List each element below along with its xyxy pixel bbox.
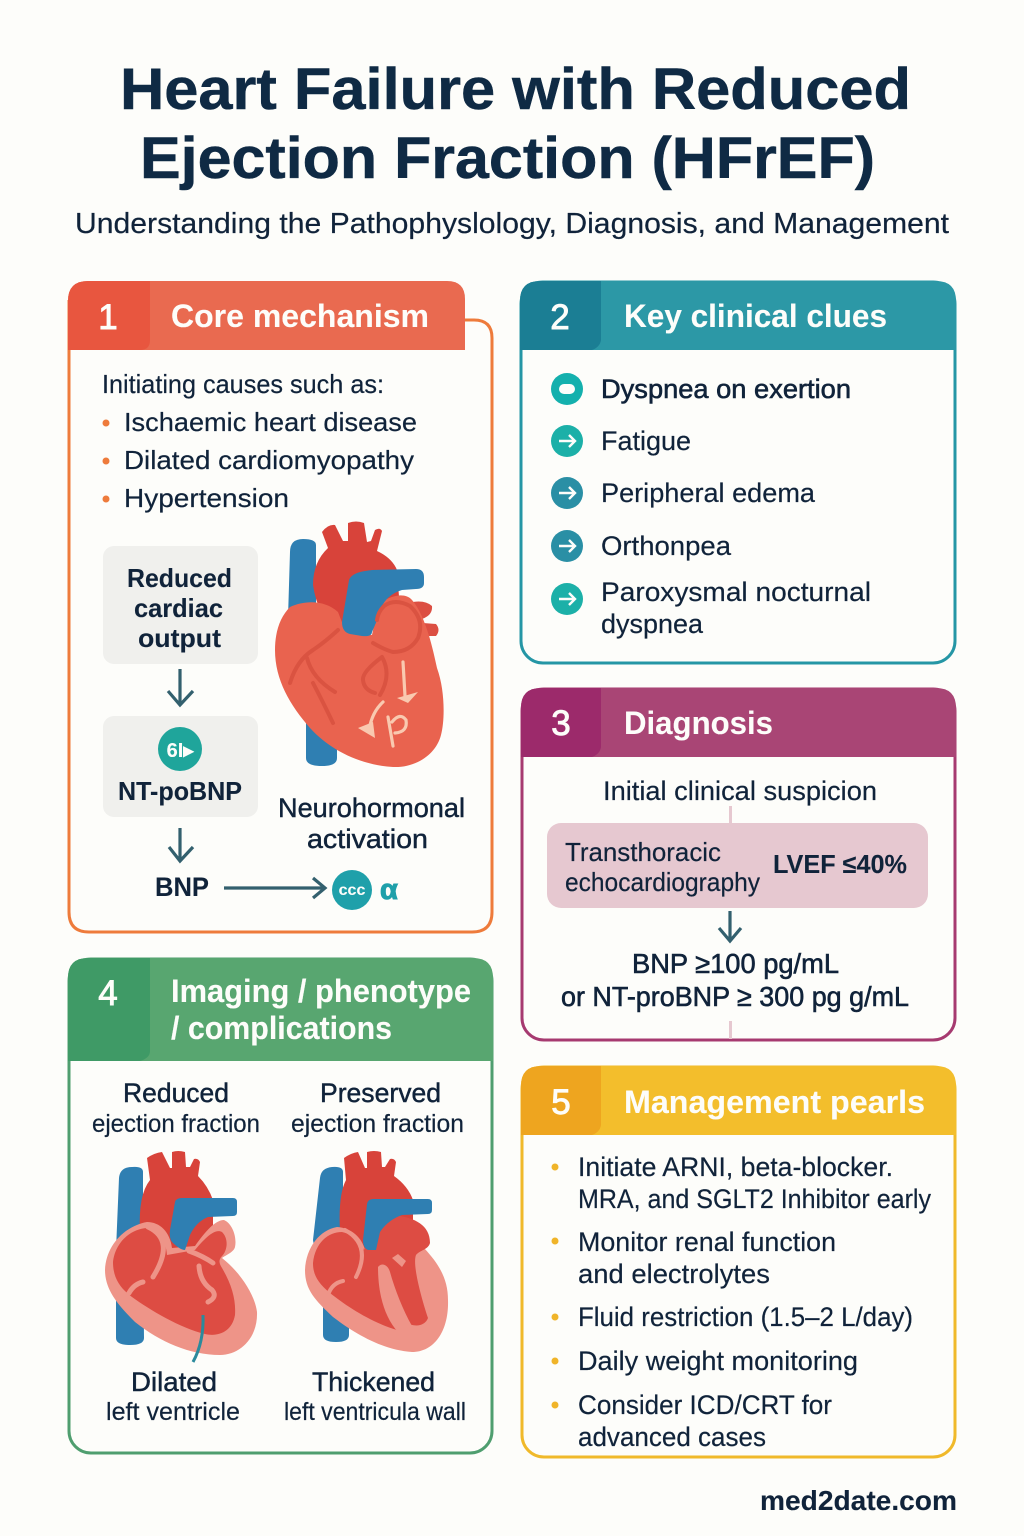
panel: key clinical clues: [520, 281, 956, 663]
pearl: monitor renal function: Monitor renal function: [578, 1227, 836, 1257]
text: initiating causes: Initiating causes such as:: [102, 369, 384, 399]
label: preserved ejection fraction: Preserved: [320, 1078, 441, 1108]
footer: site name: med2date.com: [760, 1485, 957, 1516]
box: reduced cardiac output: [103, 546, 258, 664]
title: Ejection Fraction (HFrEF): [140, 126, 875, 191]
connector: [729, 806, 732, 824]
pearl: ICD/CRT: advanced cases: [578, 1422, 766, 1452]
icon: thickened heart: [305, 1151, 448, 1352]
pearl: daily weight: Daily weight monitoring: [578, 1346, 858, 1376]
clue: fatigue: [551, 425, 691, 457]
clue: orthonpea: Orthonpea: [601, 531, 732, 561]
header: key clinical clues: [520, 281, 956, 350]
label: dilated left ventricle: left ventricle: [106, 1398, 240, 1426]
box: echocardiography and LVEF: [547, 823, 928, 908]
label: reduced ejection fraction: Reduced: [123, 1078, 229, 1108]
box: reduced cardiac output: Reduced: [127, 563, 232, 593]
box: echocardiography and LVEF: Transthoracic: [565, 837, 721, 867]
title: [120, 57, 911, 191]
panel: imaging phenotype complications: [68, 958, 493, 1453]
label: thickened left ventricular wall: Thickened: [312, 1367, 435, 1397]
header: diagnosis: Diagnosis: [624, 705, 773, 741]
icon: heart anatomy: [275, 522, 444, 767]
pearl: ICD/CRT: [552, 1390, 832, 1452]
header: diagnosis: 3: [551, 704, 571, 743]
header: management pearls: 5: [551, 1083, 571, 1122]
header: imaging phenotype complications: Imaging / phenotype: [171, 973, 471, 1009]
panel: core mechanism: [68, 281, 492, 932]
label: neurohormonal activation: activation: [307, 824, 428, 854]
icon: alpha badge: ccc: [339, 882, 365, 899]
pearl: fluid restriction: Fluid restriction (1.5–2 L/day): [578, 1302, 913, 1332]
arrow: NT-poBNP to BNP: [169, 828, 193, 861]
pearl: monitor renal function: [552, 1227, 836, 1289]
arrow: echo to natriuretic peptides: [719, 911, 741, 941]
label: dilated left ventricle: [106, 1367, 240, 1426]
box: echocardiography and LVEF: echocardiography: [565, 867, 760, 897]
clue: fatigue: Fatigue: [601, 426, 691, 456]
panel: management pearls: [521, 1066, 956, 1457]
clue: paroxysmal nocturnal dyspnea: [551, 577, 871, 639]
arrow: BNP to neurohormonal: [224, 878, 325, 898]
label: BNP: BNP: [155, 872, 209, 902]
header: core mechanism: [68, 281, 465, 350]
text: natriuretic peptide thresholds: BNP ≥100 pg/mL: [632, 948, 839, 979]
header: key clinical clues: 2: [550, 298, 570, 337]
label: reduced ejection fraction: [92, 1078, 260, 1138]
pearl: initiate therapy: MRA, and SGLT2 Inhibitor early: [578, 1184, 931, 1214]
header: core mechanism: 1: [98, 298, 118, 337]
header: management pearls: [521, 1066, 956, 1135]
panel: diagnosis: [521, 688, 956, 1040]
header: diagnosis: [521, 688, 956, 757]
text: natriuretic peptide thresholds: [561, 948, 909, 1012]
text: initiating causes: [102, 369, 417, 513]
label: preserved ejection fraction: ejection fraction: [291, 1110, 464, 1138]
label: thickened left ventricular wall: [284, 1367, 466, 1426]
clue: paroxysmal nocturnal dyspnea: Paroxysmal nocturnal: [601, 577, 871, 607]
connector: [729, 1021, 732, 1039]
clue: orthonpea: [551, 530, 732, 562]
label: thickened left ventricular wall: left ventricula wall: [284, 1398, 466, 1426]
clue: peripheral edema: Peripheral edema: [601, 478, 816, 508]
text: natriuretic peptide thresholds: or NT-proBNP ≥ 300 pg g/mL: [561, 981, 909, 1012]
header: imaging phenotype complications: [68, 958, 493, 1061]
label: preserved ejection fraction: [291, 1078, 464, 1138]
box: NT-poBNP: 6I▸: [167, 740, 194, 762]
label: neurohormonal activation: Neurohormonal: [278, 793, 465, 823]
subtitle: Understanding the Pathophyslology, Diagnosis, and Management: [75, 208, 949, 240]
text: initiating causes: Hypertension: [124, 483, 289, 513]
pearl: ICD/CRT: Consider ICD/CRT for: [578, 1390, 832, 1420]
box: reduced cardiac output: cardiac: [134, 593, 223, 623]
title: Heart Failure with Reduced: [120, 57, 911, 122]
box: NT-poBNP: [103, 716, 258, 817]
clue: paroxysmal nocturnal dyspnea: dyspnea: [601, 609, 704, 639]
header: imaging phenotype complications: / complications: [171, 1010, 392, 1046]
label: dilated left ventricle: Dilated: [131, 1367, 217, 1397]
clue: dyspnea on exertion: Dyspnea on exertion: [601, 374, 851, 404]
pearl: monitor renal function: and electrolytes: [578, 1259, 770, 1289]
box: NT-poBNP: NT-poBNP: [118, 776, 242, 806]
pearl: initiate therapy: Initiate ARNI, beta-blocker.: [578, 1152, 893, 1182]
icon: alpha badge: [332, 870, 398, 910]
label: neurohormonal activation: [278, 793, 465, 854]
header: core mechanism: Core mechanism: [171, 298, 429, 334]
box: reduced cardiac output: output: [138, 623, 221, 653]
header: key clinical clues: Key clinical clues: [624, 298, 887, 334]
icon: alpha badge: α: [380, 874, 398, 906]
box: echocardiography and LVEF: LVEF ≤40%: [773, 849, 907, 879]
label: reduced ejection fraction: ejection fraction: [92, 1110, 260, 1138]
header: imaging phenotype complications: 4: [98, 974, 118, 1013]
text: initial clinical suspicion: Initial clinical suspicion: [603, 776, 877, 806]
icon: dilated heart: [105, 1151, 257, 1362]
header: management pearls: Management pearls: [624, 1084, 925, 1120]
text: initiating causes: Dilated cardiomyopathy: [124, 445, 414, 475]
text: initiating causes: Ischaemic heart disease: [124, 407, 417, 437]
arrow: output to NT-proBNP: [168, 669, 193, 705]
pearl: initiate therapy: [552, 1152, 931, 1214]
